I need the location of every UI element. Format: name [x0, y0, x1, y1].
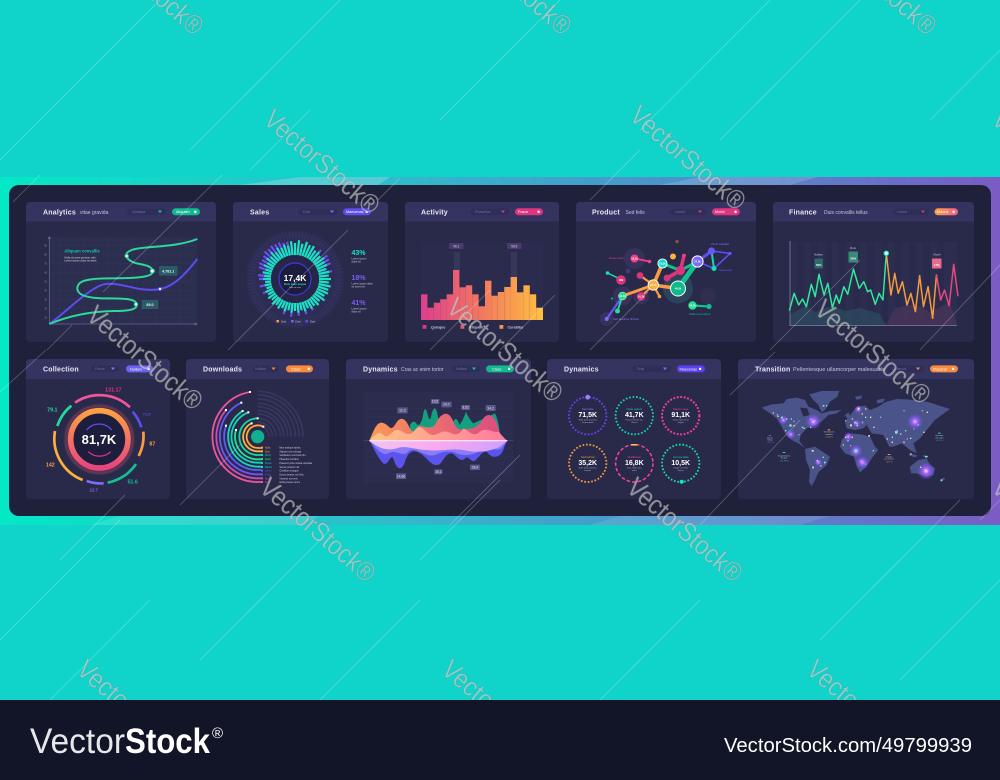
map labels: +2,56 % — [825, 437, 833, 439]
panel: collection — [26, 359, 170, 499]
line chart: analytics: 90 — [44, 245, 48, 247]
dropdown: product: Lorem — [675, 210, 685, 214]
subtitle: analytics: vitae gravida — [80, 210, 109, 216]
teal bars — [263, 240, 331, 313]
gauge: 35,2K — [569, 445, 606, 482]
dropdown: dynamics circles — [632, 366, 671, 372]
stream callouts — [396, 399, 496, 479]
map labels: sodales — [825, 434, 833, 436]
gauge: 91,1K: Mauris vitae — [673, 407, 689, 411]
stream callouts: 28,4 — [472, 466, 478, 470]
legend: sales: Duis — [296, 319, 301, 323]
center value — [284, 273, 307, 289]
purple bars — [258, 242, 332, 317]
dropdown: collection — [91, 366, 119, 372]
pill: finance: Mauris — [937, 210, 948, 214]
footer image id: VectorStock.com/49799939 — [724, 735, 972, 757]
stat: 18%: 18% — [352, 275, 366, 282]
network labels: 18,1k — [631, 256, 638, 260]
panel: downloads — [186, 359, 329, 499]
lilac layer — [369, 441, 507, 452]
watermark text: VectorStock® — [258, 104, 386, 220]
active arcs — [212, 392, 263, 482]
legend: downloads: Nam tristique lacinia — [279, 447, 301, 450]
pill: downloads — [286, 365, 313, 372]
blue curve — [49, 259, 197, 324]
center value: Nulla sit amet — [289, 286, 301, 289]
legend: downloads: Nunc — [265, 478, 271, 480]
line chart: analytics: 40 — [44, 290, 48, 292]
gauge: 10,5K — [662, 445, 699, 484]
subtitle: transition: Pellentesque ullamcorper malesuada — [793, 367, 885, 373]
world map — [762, 391, 950, 486]
center value: Duis aute augue — [284, 282, 307, 286]
stat: 41%: 41% — [352, 300, 366, 307]
segment labels — [46, 387, 155, 493]
gauge: 16,8K: Vestibulum — [627, 455, 642, 459]
stat: 41%: dolor sit — [352, 310, 361, 314]
legend: downloads: Vivamus non erat — [279, 477, 298, 480]
map labels: +1,9 % — [936, 440, 943, 442]
gauge: 16,8K: dolor — [632, 470, 637, 472]
pill: dynamics: Class — [492, 367, 502, 371]
chart note: Lorem ipsum dolor sit amet — [64, 259, 97, 263]
legend: downloads — [261, 447, 313, 484]
map labels: feugiat — [781, 457, 788, 460]
callout: 89.0 — [142, 300, 158, 309]
center dot — [251, 430, 264, 443]
donut chart: collection — [46, 387, 155, 493]
panel: analytics — [26, 202, 216, 342]
gauge: 10,5K: Integer non felis — [674, 466, 688, 469]
network labels: 27,3k — [694, 260, 701, 264]
legend: downloads: Phasellus tincidunt — [279, 458, 299, 461]
panel: activity — [405, 202, 559, 342]
line chart: analytics: 20 — [44, 308, 48, 310]
panel: product — [576, 202, 756, 342]
dashboard background — [9, 185, 991, 516]
stream callouts: 15,3 — [435, 470, 442, 474]
heading: analytics: Analytics — [43, 209, 76, 216]
pill: dynamics circles — [677, 365, 705, 372]
pill: sales — [343, 208, 371, 215]
pill: dynamics — [486, 365, 514, 372]
city hotspots — [779, 405, 935, 480]
gauge: 35,2K: Nulla pretium lacinia — [579, 466, 598, 469]
gauge: 35,2K: Sed lacinia — [581, 455, 595, 459]
center value: 81,7K — [82, 432, 117, 447]
gauge: 10,5K: mauris — [678, 470, 684, 472]
green curve — [49, 239, 197, 324]
callout: nullam — [814, 252, 824, 268]
pill: finance — [934, 208, 958, 215]
map labels: +3,9 % — [886, 462, 892, 464]
radial arc chart: downloads — [212, 391, 313, 484]
radial bar chart: sales — [246, 230, 344, 328]
legend: downloads: Mauris — [265, 466, 273, 469]
stat: 18%: sit amet elit — [352, 284, 365, 288]
peach layer — [369, 427, 507, 441]
segment labels: 131.17 — [105, 387, 122, 393]
dropdown: product — [670, 208, 706, 215]
callout: 89.0: 89.0 — [146, 303, 154, 307]
map labels: +41,78 % — [779, 461, 789, 463]
map labels: Donec — [767, 437, 774, 439]
callout: 49.1: 49.1 — [453, 244, 460, 248]
dropdown: activity — [470, 208, 509, 215]
gauge: 71,5K: tempus dolor — [582, 421, 594, 424]
gauge: 91,1K — [662, 397, 699, 434]
center value: 17,4K — [284, 273, 307, 283]
legend: downloads: Nulla — [265, 448, 271, 450]
stream callouts: 19,5 — [432, 400, 438, 404]
map labels: +7,9 % — [767, 442, 773, 444]
chart note: Nulla sit amet pretium velit — [64, 255, 96, 259]
heading: collection: Collection — [43, 366, 79, 373]
gauge: 91,1K: 91,1K — [671, 412, 690, 419]
stat: 41%: Lorem ipsum — [352, 306, 366, 310]
dropdown: analytics: Quisque — [132, 210, 145, 214]
callout: morbi: Morbi — [933, 252, 941, 256]
subtitle: product: Sed felis — [626, 210, 645, 216]
map labels: non odio — [935, 437, 944, 439]
stat: 43%: 43% — [352, 250, 366, 257]
legend: downloads: Sed ac pretium nisl — [279, 466, 300, 469]
legend: downloads: Donec tempus orci felis — [279, 473, 304, 476]
dropdown: collection: Fusce — [95, 367, 105, 371]
legend: downloads: Praesent porta massa vulputate — [279, 462, 313, 465]
network labels: Proin volutpat — [712, 242, 729, 246]
watermark text: VectorStock® — [254, 472, 382, 588]
map labels — [767, 429, 944, 464]
gauge: 10,5K: 10,5K — [671, 460, 690, 467]
callout: nullam: Nullam — [814, 252, 824, 256]
line chart: analytics: 50 — [44, 281, 48, 283]
panel: transition — [738, 359, 974, 499]
network labels: 46,5k — [675, 286, 682, 290]
dropdown: finance — [893, 208, 929, 215]
legend: sales — [276, 319, 316, 323]
line chart: analytics: 10 — [44, 317, 48, 319]
stat: 43% — [352, 250, 366, 264]
network labels: 10,1k — [619, 294, 626, 298]
gauge: 16,8K — [616, 445, 653, 482]
chart markers — [125, 254, 162, 306]
green layer — [410, 408, 499, 441]
network labels: Donec enim — [609, 256, 625, 260]
legend: downloads: Nulla posuere lorem — [279, 481, 300, 484]
pill: transition — [930, 365, 958, 372]
watermark text: VectorStock® — [441, 292, 569, 408]
dropdown: dynamics: Nullam — [456, 367, 467, 371]
legend: activity: Quisque — [431, 325, 445, 329]
continents — [762, 391, 950, 486]
panel: dynamics circles — [547, 359, 721, 499]
watermark text: VectorStock® — [621, 472, 749, 588]
gauge: 10,5K: Ut eros vitae — [673, 455, 689, 459]
gauge: 16,8K: 16,8K — [625, 460, 644, 467]
map labels: Integer — [886, 455, 893, 458]
callout: morbi: 17% — [934, 263, 940, 267]
network labels: 10,7k — [638, 294, 645, 298]
legend: activity — [423, 325, 524, 329]
map labels: Suspendisse — [778, 455, 791, 457]
legend: downloads: Donec — [265, 463, 273, 465]
heading: dynamics: Dynamics — [363, 366, 398, 373]
outer segments — [54, 395, 144, 483]
legend: downloads: Sed — [265, 482, 270, 484]
stat: 43%: Lorem ipsum — [352, 256, 366, 260]
pill: analytics: Aliquam — [176, 210, 190, 214]
panel: finance — [773, 202, 974, 342]
gauge: 41,7K: Praesent ipsum nec — [625, 419, 643, 422]
gauge: 41,7K: ultrices — [631, 421, 637, 424]
subtitle: dynamics: Cras ac enim tortor — [401, 367, 444, 373]
callout: 59.5: 59.5 — [511, 244, 518, 248]
gauge: 16,8K: Cras mollis nunc — [627, 467, 642, 469]
dropdown: activity: Phasellus — [475, 210, 491, 214]
network labels: Sed faucibus ultrices — [613, 317, 639, 321]
subtitle: finance: Duis convallis tellus — [824, 210, 868, 216]
map labels: accumsan — [884, 459, 895, 461]
legend: downloads: Fusce — [265, 474, 272, 476]
network links — [607, 251, 730, 319]
line chart: analytics: 80 — [44, 254, 48, 256]
legend: downloads: Etiam — [265, 458, 271, 461]
network graph: product — [600, 240, 733, 326]
legend: sales: Duis — [281, 319, 287, 323]
dropdown: finance: Lorem — [897, 210, 907, 214]
network labels: Maecenas — [719, 268, 733, 272]
gauge: 35,2K: tempus — [584, 469, 591, 472]
chart note — [64, 249, 100, 263]
network labels: Nulla ut hendrerit — [689, 312, 711, 316]
watermark text: VectorStock® — [81, 300, 209, 416]
pill: transition: Placerat — [933, 367, 948, 371]
gauge: 91,1K: Donec eget lectus — [673, 419, 689, 422]
pill: downloads: Class — [291, 367, 301, 371]
legend: downloads: Curabitur at augue — [279, 470, 299, 473]
watermark text: VectorStock® — [809, 294, 937, 410]
pill: collection: Nullam — [130, 367, 142, 371]
dropdown: dynamics circles: Duis — [637, 367, 644, 371]
footer logo: Vector — [30, 722, 125, 761]
legend: downloads: Morbi — [265, 454, 271, 457]
gauge: 71,5K: Nulla pretium lacinia — [579, 419, 598, 422]
callout: nullam: 56% — [816, 263, 822, 267]
gauge: 91,1K: sagittis — [678, 421, 684, 424]
gauge: 71,5K: Sed vitae — [582, 407, 594, 411]
map labels: Quisque — [935, 435, 944, 437]
stat: 41% — [352, 300, 366, 314]
heading: downloads: Downloads — [203, 366, 242, 373]
gauge: 41,7K: Class aptent — [627, 407, 642, 411]
network labels — [609, 242, 733, 321]
pill: activity — [515, 208, 543, 215]
pill: activity: Fusce — [518, 210, 528, 214]
pill: dynamics circles: Maecenas — [680, 367, 697, 371]
line chart: analytics: 60 — [44, 272, 48, 274]
legend: activity: Aliquam — [469, 325, 483, 329]
finance line — [790, 253, 958, 318]
blue layer — [369, 441, 507, 468]
peak marker — [884, 251, 888, 256]
dropdown: sales: Duis — [303, 210, 310, 214]
stream callouts: 12,3 — [399, 409, 406, 413]
heading: sales: Sales — [250, 209, 269, 216]
stat: 18% — [352, 275, 373, 288]
network labels: 18k — [619, 278, 624, 282]
callout: duis — [848, 246, 858, 262]
inactive arcs — [258, 391, 303, 437]
legend: sales: Duis — [310, 319, 316, 323]
map labels: tellus — [767, 439, 773, 442]
network nodes — [605, 240, 732, 321]
callout: 4,781.1 — [159, 266, 178, 276]
segment labels: 142 — [46, 463, 55, 469]
dropdown: downloads: Nullam — [255, 367, 266, 371]
pill: product: Morbi — [715, 210, 725, 214]
heading: finance: Finance — [789, 209, 817, 216]
segment labels: 51.6 — [127, 479, 138, 485]
segment labels: 87 — [149, 442, 155, 448]
pill: product — [712, 208, 740, 215]
footer logo: Stock — [125, 722, 210, 761]
city dots — [773, 408, 928, 468]
segment labels: 79.1 — [47, 407, 58, 413]
stream callouts: 14,7 — [443, 403, 450, 407]
watermark text: VectorStock® — [624, 100, 752, 216]
pill: collection — [126, 365, 153, 372]
legend: downloads: Duis — [265, 451, 270, 453]
network labels: 22,7k — [650, 283, 657, 287]
legend: activity: Curabitur — [508, 325, 524, 329]
gauge: 71,5K — [569, 395, 606, 434]
panel: dynamics stream — [346, 359, 531, 499]
dropdown: sales — [298, 208, 338, 215]
line chart: analytics — [44, 236, 198, 326]
line chart: finance — [790, 241, 958, 326]
line chart: analytics: 30 — [44, 299, 48, 301]
line chart: analytics: 70 — [44, 263, 48, 265]
dropdown: analytics — [127, 208, 166, 215]
gauge: 41,7K — [616, 397, 653, 434]
callout: duis: Duis — [850, 246, 856, 250]
callout: duis: 26% — [850, 256, 857, 260]
callout: 4,781.1: 4,781.1 — [162, 269, 174, 273]
heading: activity: Activity — [421, 209, 448, 216]
network labels: 24,7k — [689, 304, 696, 308]
heading: product: Product — [592, 209, 620, 216]
dropdown: downloads — [252, 366, 279, 372]
network labels: 16,3k — [659, 262, 666, 266]
legend: downloads: Vestibulum commodo dui — [279, 454, 306, 457]
legend: downloads: Aliquam erat volutpat — [279, 450, 302, 453]
coral layer — [369, 414, 507, 441]
stream callouts: 8,51 — [462, 406, 469, 410]
chart note: Aliquam convallis — [64, 249, 100, 254]
dropdown: transition — [887, 366, 924, 372]
segment labels: 12.7 — [89, 488, 98, 493]
footer bar — [0, 700, 1000, 780]
gradient band behind dashboard — [0, 177, 1000, 525]
panel: sales — [233, 202, 388, 342]
segment labels: 71.8 — [143, 412, 151, 417]
heading: transition: Transition — [755, 366, 790, 373]
pill: sales: Maecenas — [346, 210, 364, 214]
heading: dynamics circles: Dynamics — [564, 366, 599, 373]
callout: morbi — [932, 252, 942, 268]
bar chart: activity — [421, 243, 543, 320]
stat: 43%: dolor sit — [352, 260, 361, 264]
stat: 18%: Lorem ipsum dolor — [352, 282, 373, 286]
footer logo: ® — [212, 725, 223, 742]
footer logo — [30, 722, 223, 761]
stream chart: dynamics — [363, 392, 513, 483]
dropdown: dynamics — [452, 366, 480, 372]
gauge: 35,2K: 35,2K — [578, 460, 597, 467]
stream callouts: 14,68 — [397, 474, 405, 478]
stream callouts: 34,2 — [487, 406, 494, 410]
dropdown: transition: Quismod — [892, 367, 906, 371]
gauge: 71,5K: 71,5K — [578, 412, 597, 419]
legend: downloads: Lorem — [265, 470, 272, 473]
gauge: 41,7K: 41,7K — [625, 412, 644, 419]
map labels: Vestibulum — [824, 431, 834, 434]
pill: analytics — [172, 208, 200, 215]
